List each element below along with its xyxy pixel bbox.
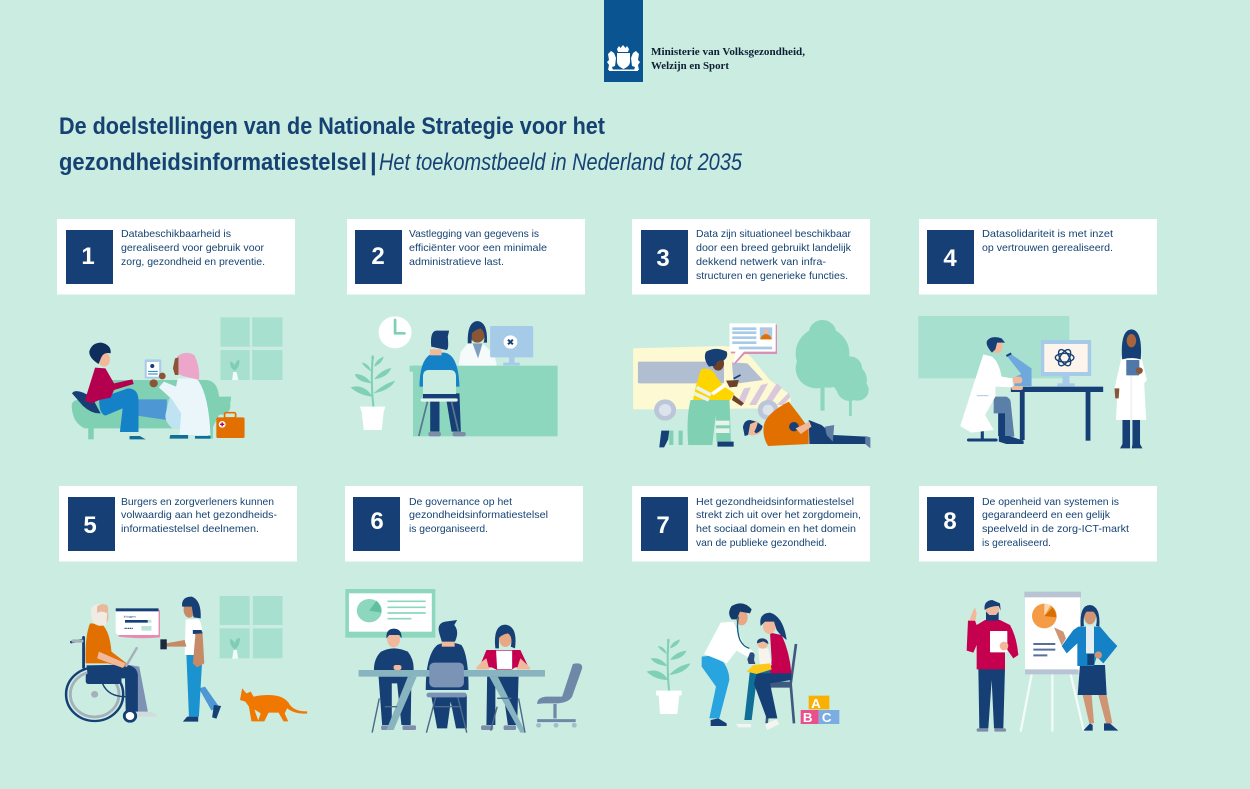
- card 6: De governance op het: [409, 497, 512, 508]
- orange cat: [240, 688, 307, 721]
- card 4: [919, 219, 1157, 294]
- window with plant: [220, 317, 282, 380]
- empty office chair: [536, 663, 582, 728]
- alphabet blocks: [801, 696, 839, 725]
- mother holding baby: [736, 613, 791, 730]
- person left: [374, 629, 416, 730]
- seated scientist: [960, 337, 1024, 444]
- person right with paper: [476, 625, 530, 730]
- card 7: het sociaal domein en het domein: [696, 524, 856, 535]
- table: [1011, 387, 1103, 441]
- illustration 2: doctor's desk with patient: [351, 316, 558, 436]
- card 3: structuren en generieke functies.: [696, 271, 848, 282]
- doctor with stethoscope: [702, 603, 753, 726]
- illustration 4: researchers with microscope: [918, 316, 1147, 448]
- card 5: [59, 486, 297, 562]
- card 8: gegarandeerd en een gelijk: [982, 510, 1111, 521]
- doctor behind desk: [458, 321, 497, 366]
- title: [59, 113, 743, 176]
- card 4: 4: [943, 245, 957, 272]
- patient on chair: [419, 331, 466, 436]
- ministry name: [651, 46, 805, 72]
- title: Het toekomstbeeld in Nederland tot 2035: [379, 149, 743, 176]
- potted plant: [647, 638, 691, 714]
- man in wheelchair: [86, 604, 156, 717]
- potted plant: [351, 355, 395, 430]
- card 8: De openheid van systemen is: [982, 497, 1119, 508]
- trees: [796, 320, 869, 416]
- card 1: Databeschikbaarheid is: [121, 229, 231, 240]
- card 8: is gerealiseerd.: [982, 538, 1051, 549]
- card 6: is georganiseerd.: [409, 524, 488, 535]
- microscope: [1006, 353, 1032, 390]
- card 5: informatiestelsel deelnemen.: [121, 524, 259, 535]
- paramedic: [659, 349, 744, 447]
- card 2: 2: [371, 243, 385, 270]
- card 5: volwaardig aan het gezondheids-: [121, 510, 277, 521]
- chair legs: [372, 697, 525, 733]
- illustration 3: paramedic, ambulance and injured man: [633, 320, 870, 448]
- card 2: [347, 219, 585, 294]
- card 3: [632, 219, 870, 294]
- ministry name: Welzijn en Sport: [651, 60, 729, 72]
- person with back to viewer: [426, 620, 469, 728]
- card 8: [919, 486, 1157, 562]
- card 1: [57, 219, 295, 294]
- login screen card: [116, 608, 160, 638]
- title: gezondheidsinformatiestelsel: [59, 149, 367, 176]
- table: [359, 670, 545, 733]
- ambulance: [633, 346, 790, 421]
- flipchart: [1021, 592, 1084, 732]
- card 5: 5: [83, 512, 97, 539]
- scientist with clipboard: [1115, 329, 1147, 448]
- illustration 8: presentation with flipchart: [967, 592, 1118, 732]
- icon: coat of arms: [607, 45, 640, 71]
- injured man lying: [743, 402, 870, 448]
- window with plant: [220, 596, 282, 659]
- title: De doelstellingen van de Nationale Strategie voor het: [59, 113, 605, 140]
- card 7: van de publieke gezondheid.: [696, 538, 827, 549]
- chair: [767, 644, 796, 723]
- card 1: gerealiseerd voor gebruik voor: [121, 243, 265, 254]
- presentation screen: [345, 589, 435, 638]
- doctor's bag: [216, 413, 245, 438]
- card 2: Vastlegging van gegevens is: [409, 229, 539, 240]
- sofa: [72, 380, 231, 439]
- card 8: speelveld in de zorg-ICT-markt: [982, 524, 1129, 535]
- card 7: Het gezondheidsinformatiestelsel: [696, 497, 854, 508]
- chair under middle person: [426, 663, 467, 697]
- card 8: 8: [943, 508, 957, 535]
- woman presenting: [1054, 605, 1118, 731]
- card 6: 6: [370, 508, 384, 535]
- alphabet blocks: A: [811, 696, 821, 711]
- baby with teddy: [747, 638, 772, 674]
- login screen card: Inloggen: [124, 615, 136, 619]
- pillow: [72, 391, 101, 413]
- man with tablet: [967, 600, 1018, 732]
- background panel: [918, 316, 1069, 378]
- card 3: Data zijn situationeel beschikbaar: [696, 229, 852, 240]
- card 3: dekkend netwerk van infra-: [696, 257, 826, 268]
- doctor with tablet: [145, 353, 210, 439]
- card 7: 7: [656, 512, 670, 539]
- card 7: [632, 486, 870, 562]
- card 2: efficiënter voor een minimale: [409, 243, 547, 254]
- wheelchair: [66, 637, 136, 721]
- computer monitor: [490, 326, 533, 365]
- card 4: Datasolidariteit is met inzet: [982, 229, 1113, 240]
- card 3: door een breed gebruikt landelijk: [696, 243, 852, 254]
- monitor with atom: [1041, 340, 1091, 386]
- alphabet blocks: B: [803, 710, 813, 725]
- card 4: op vertrouwen gerealiseerd.: [982, 243, 1113, 254]
- illustration 7: doctor examines baby on mother's lap: [647, 603, 839, 730]
- data speech bubble: [730, 323, 777, 365]
- woman on sofa: [85, 343, 167, 439]
- title: |: [370, 149, 377, 176]
- logo: Rijksoverheid ribbon with emblem: [604, 0, 643, 82]
- card 2: administratieve last.: [409, 257, 504, 268]
- login screen card: •••••: [124, 627, 133, 632]
- illustration 6: meeting around table: [345, 589, 582, 733]
- walking carer: [160, 597, 221, 722]
- card 3: 3: [656, 245, 670, 272]
- ministry name: Ministerie van Volksgezondheid,: [651, 46, 805, 58]
- card 5: Burgers en zorgverleners kunnen: [121, 497, 274, 508]
- desk: [413, 366, 558, 436]
- card 6: gezondheidsinformatiestelsel: [409, 510, 548, 521]
- card 6: [345, 486, 583, 562]
- card 7: strekt zich uit over het zorgdomein,: [696, 510, 861, 521]
- alphabet blocks: C: [822, 710, 832, 725]
- illustration 5: man in wheelchair and carer with cat: [66, 596, 307, 722]
- card 1: 1: [81, 243, 95, 270]
- card 1: zorg, gezondheid en preventie.: [121, 257, 265, 268]
- illustration 1: doctor visits woman on sofa: [72, 317, 282, 439]
- clock: [379, 316, 412, 348]
